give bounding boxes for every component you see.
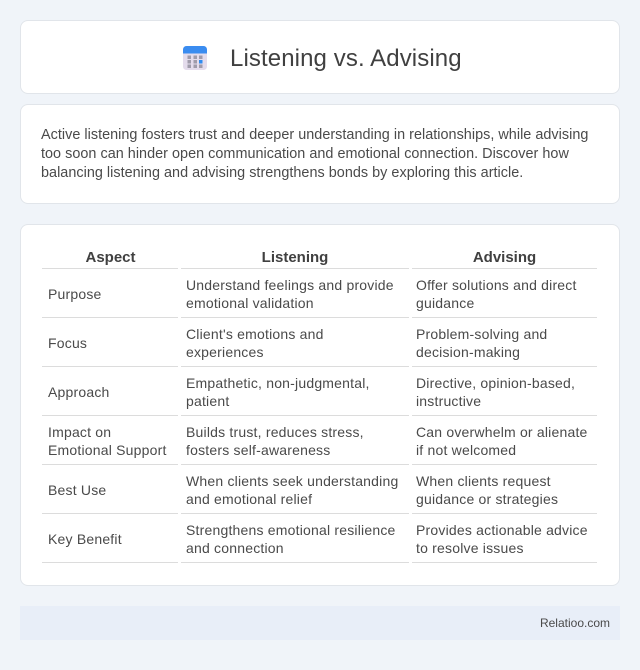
row: Impact on Emotional Support bbox=[42, 424, 597, 465]
row: Best Use: When clients seek understanding bbox=[186, 473, 398, 489]
row: Approach: Directive, opinion-based, bbox=[416, 375, 575, 391]
footer credit: Relatioo.com bbox=[540, 616, 610, 630]
row: Impact on Emotional Support: Builds trust, reduces stress, bbox=[186, 424, 364, 440]
icon: calendar bbox=[183, 46, 207, 70]
row: Impact on Emotional Support: if not welcomed bbox=[416, 442, 516, 458]
row: Approach: patient bbox=[186, 393, 229, 409]
row: Best Use: When clients request bbox=[416, 473, 551, 489]
row: Approach: Empathetic, non-judgmental, bbox=[186, 375, 370, 391]
row: Focus bbox=[42, 326, 597, 367]
row: Approach: instructive bbox=[416, 393, 481, 409]
footer bar bbox=[20, 606, 620, 640]
header card bbox=[20, 20, 620, 94]
row: Approach: Approach bbox=[48, 384, 110, 400]
row: Impact on Emotional Support: Can overwhelm or alienate bbox=[416, 424, 588, 440]
row: Purpose: Understand feelings and provide bbox=[186, 277, 394, 293]
intro paragraph: Active listening fosters trust and deeper understanding in relationships, while advising bbox=[41, 127, 588, 143]
row: Impact on Emotional Support: Impact on bbox=[48, 424, 111, 440]
panel: comparison table bbox=[20, 224, 620, 586]
intro paragraph: balancing listening and advising strengthens bonds by exploring this article. bbox=[41, 165, 523, 181]
table header: Aspect bbox=[85, 249, 136, 266]
row: Best Use bbox=[42, 473, 597, 514]
row: Focus: Focus bbox=[48, 335, 87, 351]
row: Approach bbox=[42, 375, 597, 416]
row: Purpose bbox=[42, 277, 597, 318]
row: Key Benefit: and connection bbox=[186, 540, 284, 556]
row: Key Benefit: to resolve issues bbox=[416, 540, 524, 556]
row: Focus: Client's emotions and bbox=[186, 326, 324, 342]
table header bbox=[42, 249, 597, 269]
row: Impact on Emotional Support: Emotional Support bbox=[48, 442, 167, 458]
intro paragraph: too soon can hinder open communication and emotional connection. Discover how bbox=[41, 146, 569, 162]
row: Purpose: Offer solutions and direct bbox=[416, 277, 577, 293]
row: Purpose: Purpose bbox=[48, 286, 102, 302]
row: Key Benefit: Key Benefit bbox=[48, 531, 122, 547]
row: Best Use: Best Use bbox=[48, 482, 106, 498]
row: Purpose: emotional validation bbox=[186, 295, 314, 311]
row: Key Benefit bbox=[42, 522, 597, 563]
intro paragraph bbox=[41, 127, 588, 181]
row: Purpose: guidance bbox=[416, 295, 474, 311]
table header: Advising bbox=[473, 249, 536, 266]
title: Listening vs. Advising bbox=[230, 45, 462, 72]
row: Focus: decision-making bbox=[416, 344, 520, 360]
intro text panel bbox=[20, 104, 620, 204]
row: Key Benefit: Strengthens emotional resilience bbox=[186, 522, 396, 538]
row: Best Use: guidance or strategies bbox=[416, 491, 558, 507]
row: Best Use: and emotional relief bbox=[186, 491, 312, 507]
row: Key Benefit: Provides actionable advice bbox=[416, 522, 588, 538]
row: Focus: experiences bbox=[186, 344, 264, 360]
row: Impact on Emotional Support: fosters self-awareness bbox=[186, 442, 330, 458]
table header: Listening bbox=[262, 249, 328, 266]
row: Focus: Problem-solving and bbox=[416, 326, 547, 342]
